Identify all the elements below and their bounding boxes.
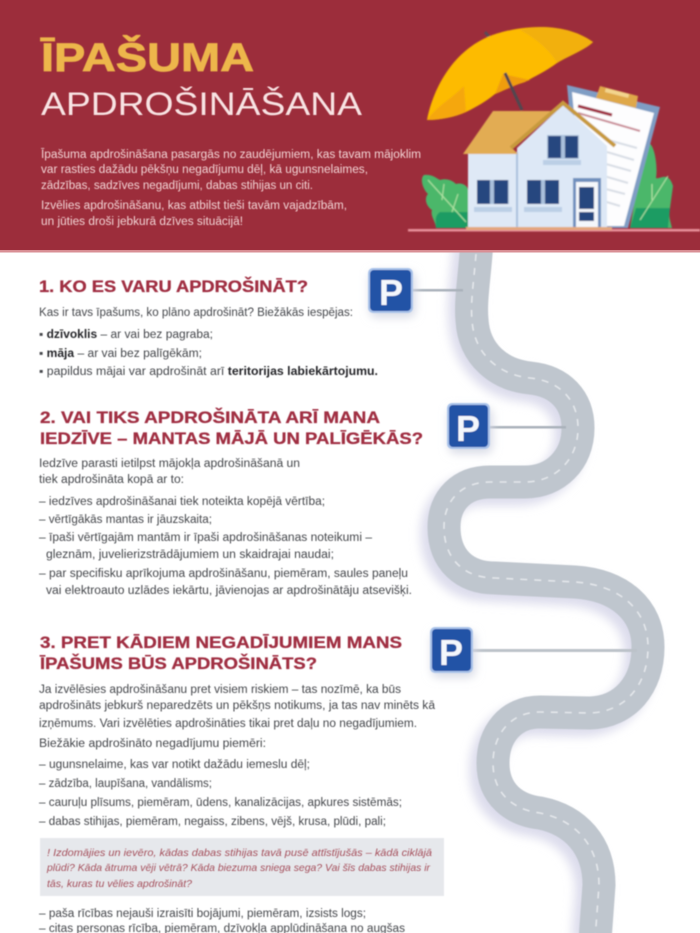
section 1 <box>39 277 378 378</box>
section 3 text: apdrošināts jebkurš neparedzēts un pēkšņs notikums, ja tas nav minēts kā <box>39 700 436 712</box>
illustration: house under umbrella with insurance policy <box>408 27 700 232</box>
parking sign 2 with connector <box>447 403 566 453</box>
section 3 text: – dabas stihijas, piemēram, negaiss, zibens, vējš, krusa, plūdi, pali; <box>39 816 386 828</box>
header intro text: Izvēlies apdrošināšanu, kas atbilst tieši tavām vajadzībām, <box>41 200 347 212</box>
callout <box>40 838 444 896</box>
section 2 text: – iedzīves apdrošināšanai tiek noteikta kopējā vērtība; <box>39 496 325 508</box>
icon: left bush <box>422 175 468 228</box>
section 2 text: gleznām, juvelierizstrādājumiem un skaidrajai naudai; <box>46 549 334 561</box>
section 2 text: – īpaši vērtīgajām mantām ir īpaši apdrošināšanas noteikumi – <box>39 532 373 544</box>
heading 3: ĪPAŠUMS BŪS APDROŠINĀTS? <box>39 654 317 673</box>
section 1 text: ▪ dzīvoklis – ar vai bez pagraba; <box>39 329 213 341</box>
icon: umbrella <box>427 27 593 120</box>
parking sign 1 with connector <box>368 268 463 317</box>
section 1 text: ▪ māja – ar vai bez palīgēkām; <box>39 348 202 360</box>
callout: plūdi? Kāda ātruma vēji vētrā? Kāda biezuma sniega sega? Vai šīs dabas stihijas ir <box>46 862 430 874</box>
heading 2: IEDZĪVE – MANTAS MĀJĀ UN PALĪGĒKĀS? <box>40 429 423 448</box>
header intro text: un jūties droši jebkurā dzīves situācijā! <box>41 216 243 228</box>
section 2 text: – vērtīgākās mantas ir jāuzskaita; <box>39 514 212 526</box>
section 3 text: Ja izvēlēsies apdrošināšanu pret visiem riskiem – tas nozīmē, ka būs <box>39 684 401 696</box>
section 3 text: – ugunsnelaime, kas var notikt dažādu iemeslu dēļ; <box>39 759 310 771</box>
section 3 <box>39 633 444 933</box>
section 2 text: – par specifisku aprīkojuma apdrošināšanu, piemēram, saules paneļu <box>39 568 408 580</box>
section 2 <box>39 408 423 597</box>
header intro text <box>41 149 421 228</box>
section 3 text: izņēmums. Vari izvēlēties apdrošināties tikai pret daļu no negadījumiem. <box>39 718 417 730</box>
title: APDROŠINĀŠANA <box>41 86 363 122</box>
title <box>40 34 363 122</box>
heading 2 <box>40 408 423 448</box>
section 2 text <box>39 458 412 597</box>
heading 3 <box>39 633 402 673</box>
heading 2: 2. VAI TIKS APDROŠINĀTA ARĪ MANA <box>40 408 380 427</box>
section 1 text: ▪ papildus mājai var apdrošināt arī teritorijas labiekārtojumu. <box>39 366 378 378</box>
heading 3: 3. PRET KĀDIEM NEGADĪJUMIEM MANS <box>40 633 402 652</box>
icon: clipboard <box>567 85 660 228</box>
parking sign 3 with connector <box>430 627 637 677</box>
section 3 text: – zādzība, laupīšana, vandālisms; <box>39 778 212 790</box>
title: ĪPAŠUMA <box>40 34 254 80</box>
icon: right bush <box>630 144 673 228</box>
callout: tās, kuras tu vēlies apdrošināt? <box>47 878 192 890</box>
section 2 text: vai elektroauto uzlādes iekārtu, jāvienojas ar apdrošinātāju atsevišķi. <box>46 585 412 597</box>
section 3 text continued <box>39 908 405 933</box>
parking sign 3 with connector: P <box>439 632 463 673</box>
section 2 text: Iedzīve parasti ietilpst mājokļa apdrošināšanā un <box>39 458 300 470</box>
section 3 text <box>39 684 436 828</box>
parking sign 2 with connector: P <box>456 408 480 449</box>
header intro text: var rasties dažādu pēkšņu negadījumu dēļ, kā ugunsnelaimes, <box>41 164 368 176</box>
icon: house <box>463 103 615 230</box>
header intro text: zādzības, sadzīves negadījumi, dabas stihijas un citi. <box>41 180 313 192</box>
header panel <box>0 0 700 252</box>
header intro text: Īpašuma apdrošināšana pasargās no zaudējumiem, kas tavam mājoklim <box>41 149 421 161</box>
section 3 text: Biežākie apdrošināto negadījumu piemēri: <box>39 738 266 750</box>
section 1 text: Kas ir tavs īpašums, ko plāno apdrošināt? Biežākās iespējas: <box>39 307 353 319</box>
section 1 text <box>39 307 378 378</box>
callout: ! Izdomājies un ievēro, kādas dabas stihijas tavā pusē attīstījušās – kādā ciklājā <box>47 847 432 859</box>
section 3 text continued: – paša rīcības nejauši izraisīti bojājumi, piemēram, izsists logs; <box>39 908 366 920</box>
section 3 text: – cauruļu plīsums, piemēram, ūdens, kanalizācijas, apkures sistēmās; <box>39 797 402 809</box>
heading 1: 1. KO ES VARU APDROŠINĀT? <box>39 277 308 296</box>
parking sign 1 with connector: P <box>379 272 403 313</box>
road <box>437 240 648 933</box>
section 2 text: tiek apdrošināta kopā ar to: <box>39 474 184 486</box>
